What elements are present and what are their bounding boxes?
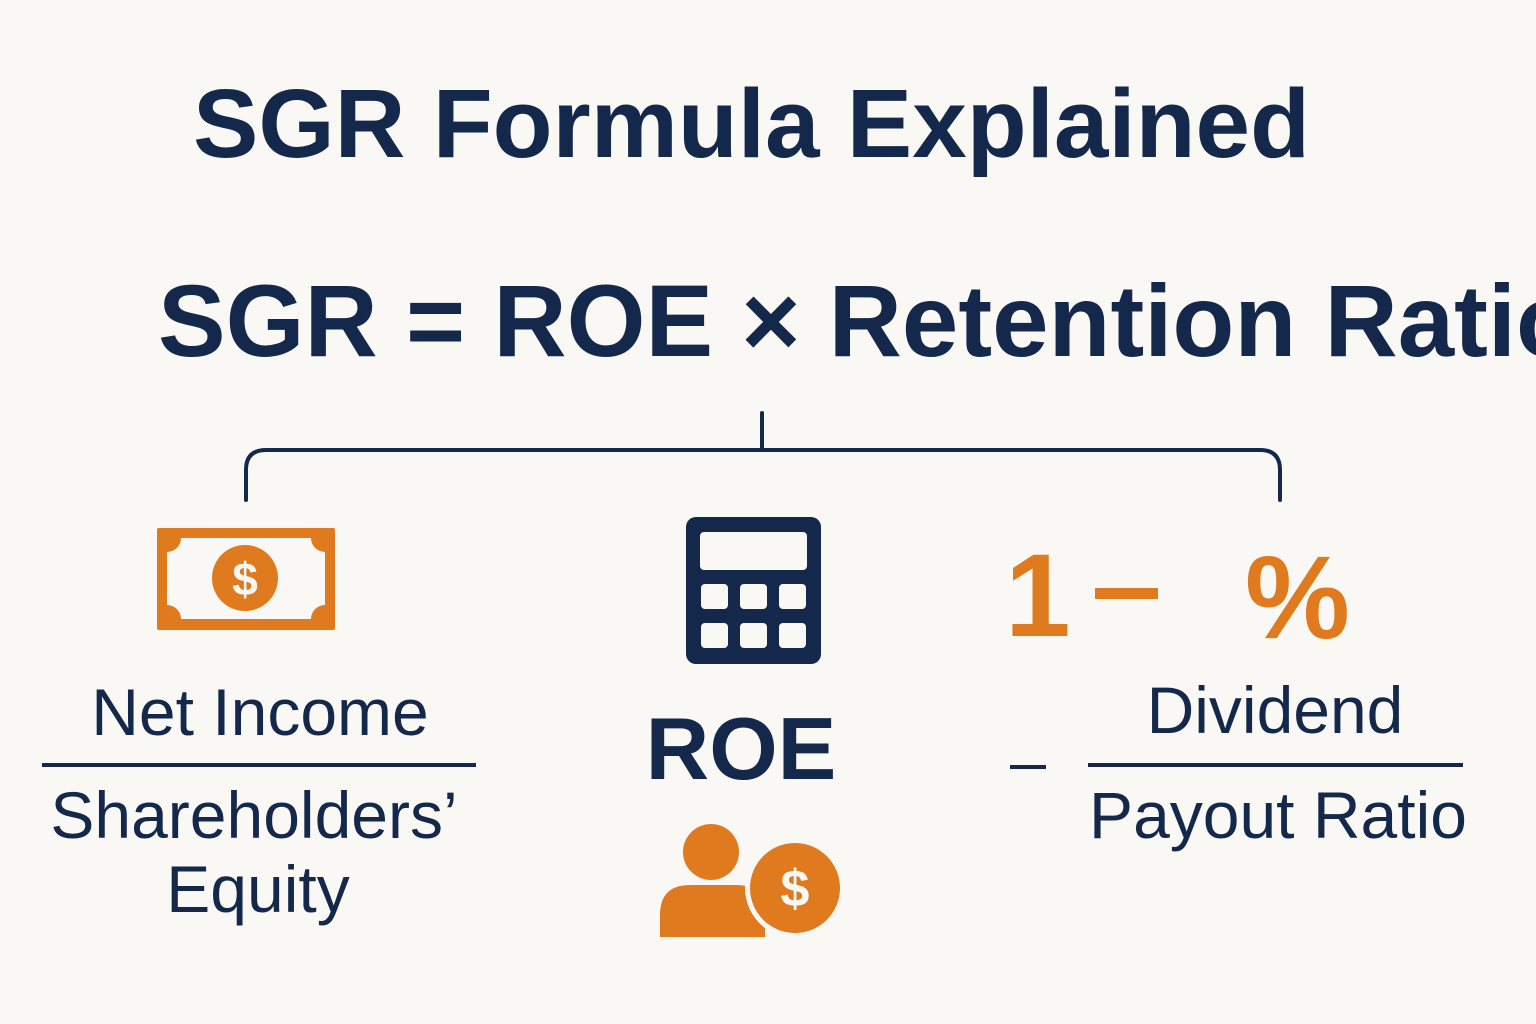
fraction: net income / shareholders' equity: Net Income: [91, 675, 429, 749]
fraction: dividend payout ratio: Payout Ratio: [1089, 778, 1467, 852]
icon: money bill: [157, 528, 335, 630]
icon: money bill: $: [232, 553, 258, 605]
ROE label: ROE: [646, 699, 836, 798]
orange "1 - %": %: [1245, 532, 1350, 664]
bracket connector: [246, 413, 1280, 500]
fraction: net income / shareholders' equity: [42, 675, 476, 926]
fraction: net income / shareholders' equity: Equity: [166, 852, 350, 926]
icon: calculator: [686, 517, 821, 664]
orange "1 - %": 1: [1005, 530, 1071, 662]
fraction: dividend payout ratio: Dividend: [1147, 673, 1403, 747]
orange "1 - %": [1005, 530, 1350, 664]
fraction: net income / shareholders' equity: Shareholders’: [50, 778, 458, 852]
title: SGR Formula Explained: [193, 69, 1310, 178]
icon: person with dollar: [660, 824, 845, 938]
icon: person with dollar: $: [781, 860, 810, 918]
fraction: dividend payout ratio: [1010, 673, 1467, 852]
